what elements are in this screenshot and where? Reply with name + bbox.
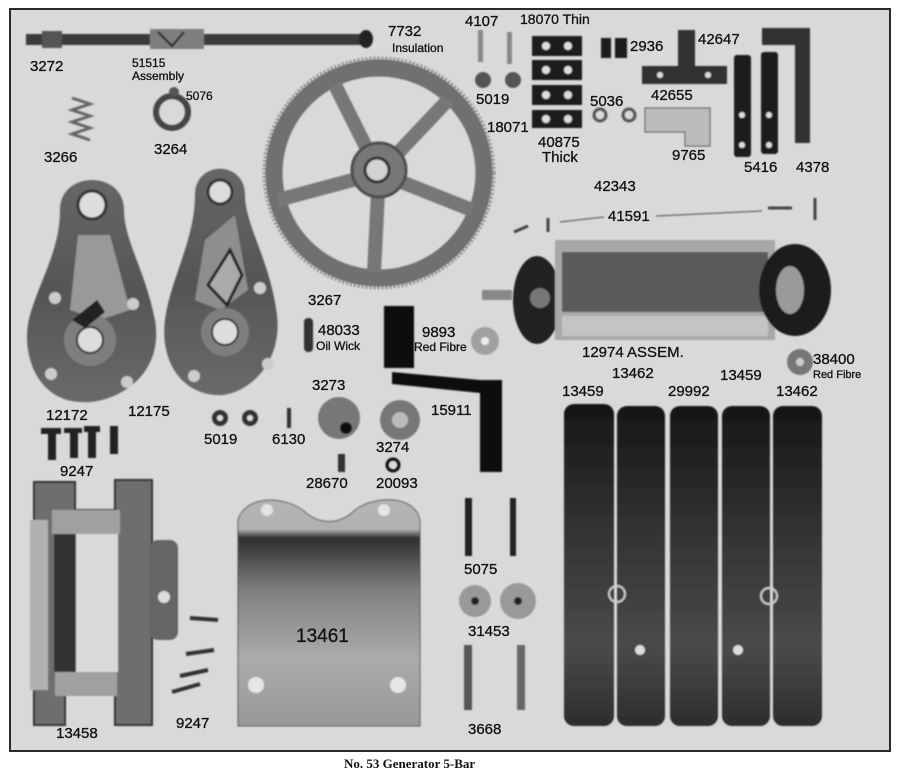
- part labels: 51515: [132, 56, 166, 70]
- part labels: 6130: [272, 431, 305, 448]
- part labels: Assembly: [132, 69, 184, 83]
- washers: [212, 318, 813, 619]
- part labels: 42655: [651, 87, 693, 104]
- armature 12974: [482, 240, 831, 344]
- part labels: 5416: [744, 159, 777, 176]
- part labels: 3264: [154, 141, 187, 158]
- part labels: 3267: [308, 292, 341, 309]
- part labels: 4378: [796, 159, 829, 176]
- part labels: 3272: [30, 58, 63, 75]
- frame 13458: [30, 480, 178, 725]
- part labels: 13462: [776, 383, 818, 400]
- part labels: 38400: [813, 351, 855, 368]
- part labels: 5019: [204, 431, 237, 448]
- part labels: 3668: [468, 721, 501, 738]
- part labels: Red Fibre: [813, 369, 861, 381]
- collar 3264: [156, 87, 188, 128]
- part labels: 12974 ASSEM.: [582, 344, 684, 361]
- part labels: 3274: [376, 439, 409, 456]
- part labels: 28670: [306, 475, 348, 492]
- part labels: Insulation: [392, 41, 443, 55]
- long screws 5075 and 3668: [464, 498, 525, 710]
- right bearing bracket 12175: [164, 169, 278, 395]
- part labels: 5075: [464, 561, 497, 578]
- part labels: 9765: [672, 147, 705, 164]
- part labels: 41591: [608, 208, 650, 225]
- part labels: 13459: [562, 383, 604, 400]
- part labels: 12175: [128, 403, 170, 420]
- part labels: 2936: [630, 38, 663, 55]
- part labels: 20093: [376, 475, 418, 492]
- screws 9247 upper: [41, 426, 118, 460]
- part labels: Thick: [542, 149, 578, 166]
- part labels: 3266: [44, 149, 77, 166]
- brush plate 13461: [238, 500, 420, 726]
- part labels: 31453: [468, 623, 510, 640]
- part labels: 13458: [56, 725, 98, 742]
- part labels: 5019: [476, 91, 509, 108]
- part labels: 9247: [60, 463, 93, 480]
- part labels: 42647: [698, 31, 740, 48]
- part labels: 13462: [612, 365, 654, 382]
- part labels: 9893: [422, 324, 455, 341]
- part labels: 40875: [538, 134, 580, 151]
- shaft 3272: [26, 29, 373, 49]
- part labels: 4107: [465, 13, 498, 30]
- left bearing bracket 12172: [27, 180, 156, 402]
- part labels: 48033: [318, 322, 360, 339]
- pole pieces 13459 13462 29992: [564, 404, 822, 726]
- part labels: 5036: [590, 93, 623, 110]
- part labels: 3273: [312, 377, 345, 394]
- part labels: 42343: [594, 178, 636, 195]
- part labels: 9247: [176, 715, 209, 732]
- part labels: 5076: [186, 89, 213, 103]
- caption: No. 53 Generator 5-Bar: [344, 756, 475, 771]
- handwheel 3267: [264, 58, 494, 288]
- screws 9247 lower: [172, 618, 218, 692]
- spring 3266: [72, 98, 90, 140]
- part labels: 13461: [296, 626, 349, 647]
- part labels: 7732: [388, 23, 421, 40]
- part labels: 13459: [720, 367, 762, 384]
- part labels: Red Fibre: [414, 340, 467, 354]
- crank 15911: [384, 306, 502, 472]
- part labels: 18070 Thin: [520, 11, 590, 27]
- screws 41591: [514, 198, 815, 232]
- part labels: Oil Wick: [316, 339, 361, 353]
- small terminal parts: [475, 28, 810, 157]
- part labels: 15911: [431, 402, 472, 419]
- part labels: 18071: [487, 119, 529, 136]
- part labels: 12172: [46, 407, 88, 424]
- part labels: 29992: [668, 383, 710, 400]
